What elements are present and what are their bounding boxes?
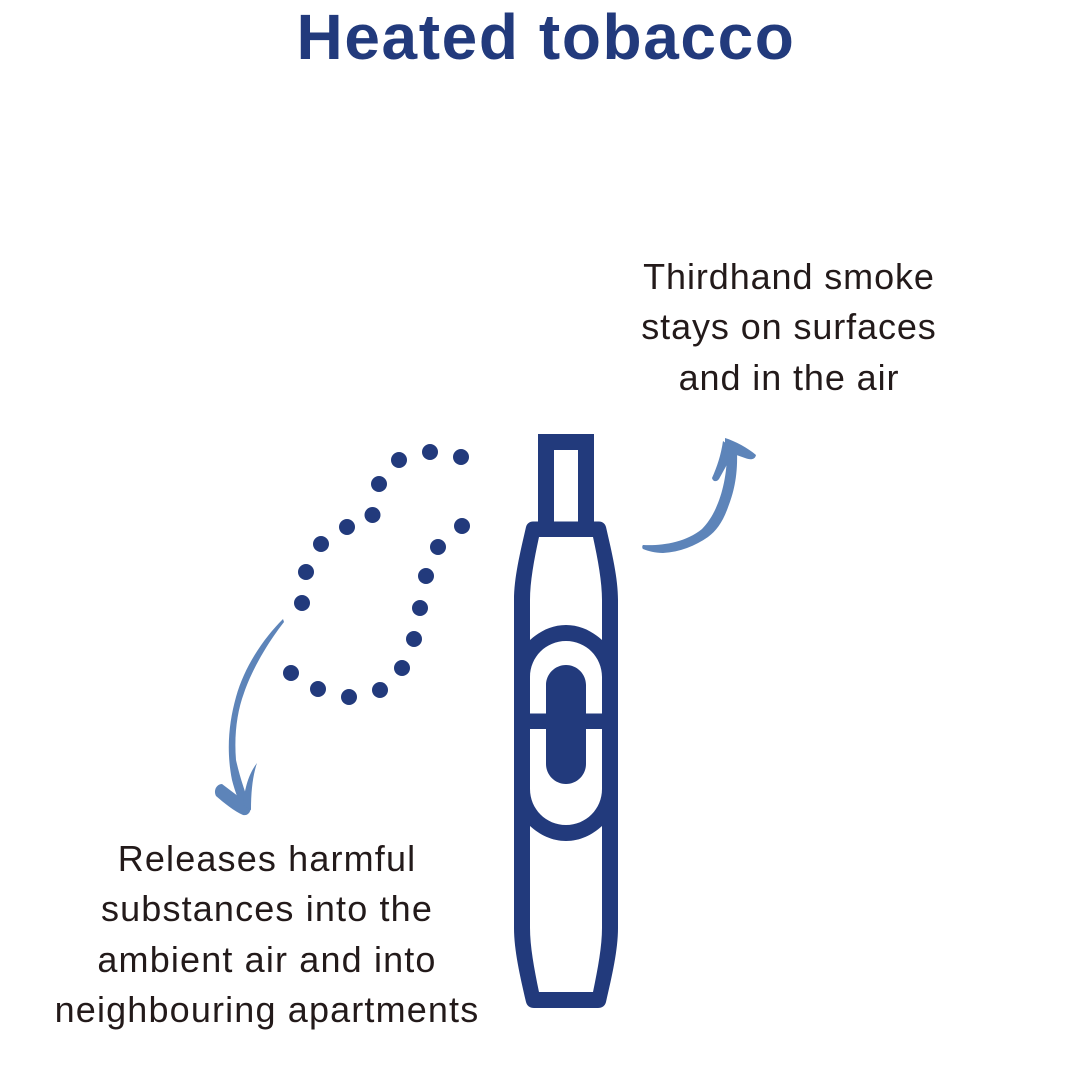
- icon: heated tobacco device: [514, 434, 618, 1008]
- arrow: up to thirdhand smoke text: [642, 438, 756, 553]
- text: thirdhand smoke: [641, 256, 937, 398]
- text: thirdhand smoke: Thirdhand smoke: [643, 256, 935, 297]
- text: releases harmful substances: neighbouring apartments: [55, 989, 479, 1030]
- text: thirdhand smoke: and in the air: [679, 357, 899, 398]
- arrow: down to released substances text: [215, 619, 284, 815]
- text: releases harmful substances: Releases harmful: [118, 838, 416, 879]
- text: releases harmful substances: substances into the: [101, 888, 433, 929]
- text: releases harmful substances: [55, 838, 479, 1030]
- title: Heated tobacco: [297, 1, 795, 73]
- text: thirdhand smoke: stays on surfaces: [641, 306, 937, 347]
- smoke dots: [283, 444, 470, 705]
- text: releases harmful substances: ambient air and into: [97, 939, 437, 980]
